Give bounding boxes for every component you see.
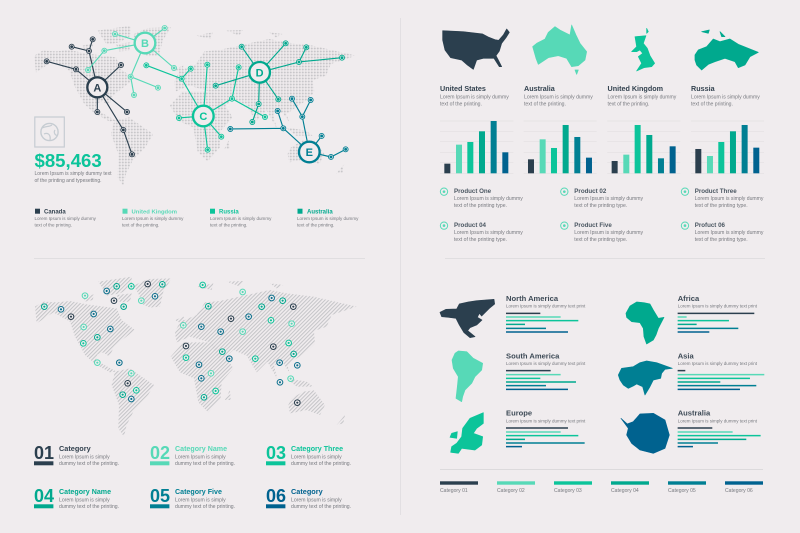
continent headings: Europe (506, 409, 532, 418)
right horizontal divider (445, 258, 765, 259)
chart: United States (444, 121, 508, 173)
country labels: Lorem Ipsum is simply dummy (691, 94, 760, 100)
panel: hatched location map (34, 277, 357, 510)
legend: Russia (210, 209, 272, 228)
map caption: Lorem Ipsum is simply dummy text (34, 171, 112, 177)
category 01 (34, 443, 119, 467)
country labels: Lorem Ipsum is simply dummy (440, 94, 509, 100)
category 05: Category Five (175, 488, 222, 496)
country labels: text of the printing. (608, 101, 649, 107)
left horizontal divider (34, 258, 365, 259)
product labels: Lorem Ipsum is simply dummy (454, 196, 523, 202)
legend: Australia: text of the printing. (297, 223, 334, 228)
continent bars (506, 313, 764, 447)
continent captions: Lorem Ipsum is simply dummy text print (678, 304, 758, 308)
category 04 (34, 486, 119, 510)
country labels: Australia (524, 84, 556, 93)
product labels: Product Five (574, 222, 612, 229)
category legend (440, 481, 763, 494)
legend: United Kingdom: Lorem Ipsum is simply dummy (122, 216, 184, 221)
legend: Canada: Lorem Ipsum is simply dummy (34, 216, 97, 221)
product labels: text of the printing type. (574, 203, 627, 209)
big number: $85,463 (34, 150, 102, 171)
category 03: dummy text of the printing. (291, 461, 351, 467)
legend: Australia: Lorem Ipsum is simply dummy (297, 216, 359, 221)
category legend: Category 01 (440, 488, 468, 494)
network A: A (93, 82, 101, 94)
continent headings: North America (506, 294, 559, 303)
continent headings: Africa (678, 294, 700, 303)
chart: Australia (528, 125, 592, 173)
product icons (440, 188, 689, 229)
product labels: text of the printing type. (574, 237, 627, 243)
product labels: text of the printing type. (454, 203, 507, 209)
category 02: dummy text of the printing. (175, 461, 235, 467)
map caption (34, 171, 112, 184)
map: Africa (626, 302, 664, 344)
category 04: Category Name (59, 488, 111, 496)
network B (85, 25, 176, 97)
product labels: text of the printing type. (454, 237, 507, 243)
category 05: Lorem Ipsum is simply (175, 497, 226, 503)
category 04: 04 (34, 486, 54, 506)
panel: network map (34, 25, 359, 228)
category 03: Category Three (291, 445, 343, 453)
category 02 (150, 443, 235, 467)
product labels: Lorem Ipsum is simply dummy (454, 230, 523, 236)
location markers (41, 281, 300, 405)
country labels: United Kingdom (608, 84, 663, 93)
country silhouettes (443, 25, 758, 74)
product labels: text of the printing type. (695, 237, 748, 243)
product labels: Profuct 06 (695, 222, 726, 229)
bottom divider (440, 469, 763, 470)
continent captions: Lorem Ipsum is simply dummy text print (506, 304, 586, 308)
product labels: Product One (454, 188, 492, 195)
category 06: 06 (266, 486, 286, 506)
icon: globe box (35, 117, 64, 147)
legend: Canada: Canada (44, 210, 66, 216)
category 06: Category (291, 487, 324, 496)
map: United States (443, 29, 509, 69)
legend: United Kingdom: text of the printing. (122, 223, 159, 228)
category 05: dummy text of the printing. (175, 504, 235, 510)
bar charts (440, 121, 764, 173)
legend: Australia (297, 209, 359, 228)
chart grid lines (440, 121, 764, 173)
map: Russia (695, 30, 758, 70)
chart: Russia (695, 125, 759, 173)
legend: Russia: Russia (219, 210, 239, 216)
category 05: 05 (150, 486, 170, 506)
category legend: Category 05 (668, 488, 696, 494)
map: Asia (618, 361, 672, 395)
category 04: Lorem Ipsum is simply (59, 497, 110, 503)
country labels: text of the printing. (440, 101, 482, 107)
country labels: United States (440, 84, 486, 93)
map: Antarctica shape labelled Australia (621, 413, 669, 453)
category 02: 02 (150, 443, 170, 463)
continent silhouettes (440, 299, 672, 453)
panel: countries (440, 25, 764, 494)
country labels: Lorem Ipsum is simply dummy (524, 94, 593, 100)
country labels: text of the printing. (524, 101, 566, 107)
product labels: Product 04 (454, 222, 487, 229)
country labels: text of the printing. (691, 101, 733, 107)
continent captions: Lorem Ipsum is simply dummy text print (506, 418, 586, 423)
dotted world map (34, 26, 356, 186)
network E: E (306, 147, 313, 159)
category legend: Category 02 (497, 488, 525, 494)
product labels: Lorem Ipsum is simply dummy (574, 196, 644, 202)
map: Europe (450, 413, 483, 453)
map: United Kingdom (632, 28, 655, 71)
category 01: Category (59, 444, 92, 453)
category 03 (266, 443, 351, 467)
continent captions: Lorem Ipsum is simply dummy text print (678, 418, 758, 423)
network D: D (256, 67, 264, 79)
continent captions: Lorem Ipsum is simply dummy text print (506, 361, 586, 366)
category legend: Category 03 (554, 488, 582, 494)
chart: United Kingdom (612, 125, 676, 173)
continent captions: Lorem Ipsum is simply dummy text print (678, 361, 758, 366)
continent headings: South America (506, 351, 560, 360)
panel: continents (440, 294, 764, 494)
continent headings: Australia (678, 409, 711, 418)
category 05 (150, 486, 235, 510)
map: Australia (533, 25, 587, 74)
legend: United Kingdom (122, 209, 184, 228)
category legend: Category 06 (725, 488, 753, 494)
network E (228, 96, 348, 162)
product labels: Product 02 (574, 188, 607, 195)
category 06: Lorem Ipsum is simply (291, 497, 342, 503)
product labels: Lorem Ipsum is simply dummy (574, 230, 644, 236)
category 02: Lorem Ipsum is simply (175, 454, 226, 460)
network C (144, 62, 267, 152)
category 01: dummy text of the printing. (59, 461, 119, 467)
legend: Canada: text of the printing. (34, 223, 72, 228)
network connections and nodes (44, 25, 348, 162)
country labels: Russia (691, 84, 716, 93)
product labels: Lorem Ipsum is simply dummy (695, 230, 764, 236)
product labels: Lorem Ipsum is simply dummy (695, 196, 764, 202)
network C: C (199, 111, 207, 123)
map: South America (452, 351, 483, 402)
legend: Australia: Australia (307, 210, 333, 216)
category legend: Category 04 (611, 488, 639, 494)
country labels (440, 84, 760, 107)
map: North America (440, 299, 495, 338)
category 04: dummy text of the printing. (59, 504, 119, 510)
category 06 (266, 486, 351, 510)
category 01: 01 (34, 443, 54, 463)
network B: B (141, 38, 149, 50)
product list (440, 188, 764, 243)
continent headings: Asia (678, 351, 695, 360)
hatched world map (35, 277, 357, 437)
continent headings (506, 294, 711, 418)
legend: Russia: text of the printing. (210, 223, 247, 228)
legend: Canada (34, 209, 97, 228)
product labels: text of the printing type. (695, 203, 748, 209)
product labels: Product Three (695, 188, 737, 195)
country labels: Lorem Ipsum is simply dummy (608, 94, 677, 100)
category 06: dummy text of the printing. (291, 504, 351, 510)
category 01: Lorem Ipsum is simply (59, 454, 110, 460)
network A (44, 37, 134, 157)
category 02: Category Name (175, 445, 227, 453)
product labels (454, 188, 764, 243)
legend: United Kingdom: United Kingdom (132, 210, 177, 216)
network D (213, 41, 344, 124)
continent captions (506, 304, 758, 423)
center divider (400, 18, 401, 515)
category 03: 03 (266, 443, 286, 463)
map caption: of the printing and typesetting. (34, 178, 102, 184)
legend: Russia: Lorem Ipsum is simply dummy (210, 216, 272, 221)
category 03: Lorem Ipsum is simply (291, 454, 342, 460)
